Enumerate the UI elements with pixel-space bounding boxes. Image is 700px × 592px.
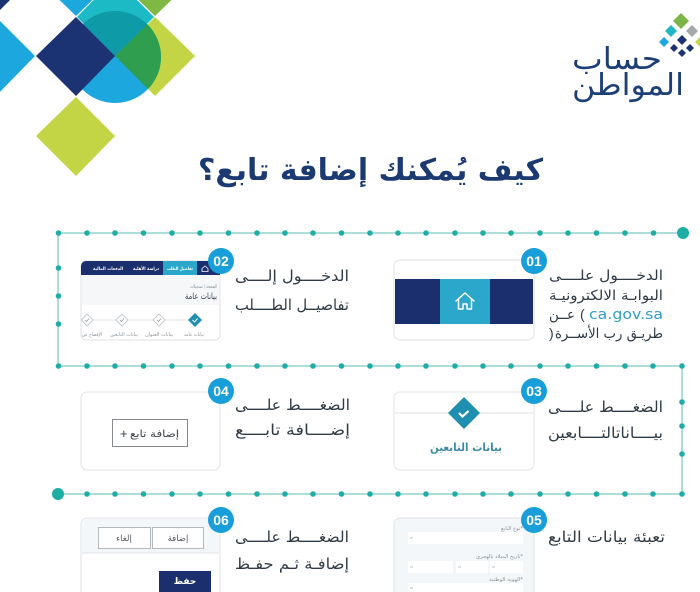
step 05 card: dependent form: نوع التابع* (501, 526, 524, 532)
step 04 text (235, 396, 350, 439)
step 02 card: request details screen: الإفصاح عن (82, 332, 102, 338)
step 04 badge (208, 378, 234, 404)
logo wordmark: المواطن (572, 68, 684, 103)
step 01 badge: 01 (526, 253, 542, 269)
dotted timeline frame (52, 227, 689, 500)
step 06 (81, 507, 349, 592)
step 02 card: request details screen: الصفحة / تسجيلات (190, 284, 217, 290)
step 06 card: add and save buttons: حفظ (174, 577, 196, 587)
step 04 (81, 378, 350, 470)
step 02 card: request details screen: الدفعات المالية (93, 267, 123, 272)
step 03 (394, 378, 663, 470)
step 04 badge: 04 (213, 383, 229, 399)
step 03 text: الضغــــط علــــى (548, 398, 663, 416)
step 02 text (235, 267, 349, 314)
step 02 (81, 248, 349, 340)
step 02 badge (208, 248, 234, 274)
step 06 text: الضغــــط علــــى (235, 528, 349, 546)
step 03 badge (521, 378, 547, 404)
step 06 badge (208, 507, 234, 533)
step 02 card: request details screen: بيانات عامة (185, 292, 217, 302)
step 04 text: إضــــافة تابــــع (235, 421, 350, 439)
step 03 card: dependents data (394, 392, 534, 470)
step 02 card: request details screen: تفاصيل الطلب (167, 267, 193, 272)
step 05 text: تعبئة بيانات التابع (548, 528, 665, 546)
step 03 card: dependents data: بيانات التابعين (430, 441, 502, 454)
step 01 text: ( (580, 306, 585, 322)
step 02 text: تفاصيــل الطــــلب (235, 296, 349, 314)
step 02 card: request details screen: بيانات عامة (184, 332, 204, 338)
decorative geometric diamonds (0, 0, 195, 176)
step 02 card: request details screen: بيانات العنوان (145, 332, 173, 338)
step 05 card: dependent form: تاريخ الميلاد بالهجري* (476, 554, 524, 560)
logo: hesab almowaten (572, 13, 700, 103)
step 01 text (549, 268, 663, 342)
step 05 (394, 507, 665, 592)
step 01 text: ca.gov.sa (589, 307, 663, 323)
step 02 card: request details screen: دراسة الأهلية (133, 265, 160, 272)
logo mark: diamonds (659, 13, 700, 57)
step 06 card: add and save buttons: إضافة (168, 534, 188, 544)
step 04 card: add dependent button: إضافة تابع (130, 429, 179, 440)
step 01 badge (521, 248, 547, 274)
step 06 badge: 06 (213, 512, 229, 528)
step 01 text: الدخــــول علــــى (549, 268, 663, 284)
step 01 text: البوابـة الالكترونيـة (549, 288, 663, 304)
step 04 card: add dependent button (81, 392, 220, 470)
step 04 card: add dependent button: + (120, 426, 128, 441)
step 01 card: home banner (394, 260, 534, 340)
step 06 card: add and save buttons (81, 518, 220, 592)
step 02 card: request details screen (81, 261, 220, 340)
logo wordmark (572, 42, 684, 103)
step 01 text: عــن (549, 307, 575, 323)
step 01 (394, 248, 663, 342)
step 05 card: dependent form (394, 518, 534, 592)
step 04 text: الضغــــط علــــى (235, 396, 350, 414)
step 05 badge (521, 507, 547, 533)
step 01 text: طريـق رب الأســرة (555, 324, 663, 342)
step 05 card: dependent form: الهوية الوطنية* (489, 577, 524, 583)
step 06 card: add and save buttons: إلغاء (116, 534, 132, 544)
step 05 badge: 05 (526, 512, 542, 528)
step 02 badge: 02 (213, 253, 229, 269)
step 06 text: إضافـة ثـم حفـظ (235, 555, 349, 573)
step 06 text (235, 528, 349, 573)
step 02 text: الدخــــول إلــــى (235, 267, 349, 285)
logo wordmark: حساب (572, 42, 662, 77)
step 02 card: request details screen: بيانات التابعين (110, 332, 138, 338)
step 03 badge: 03 (526, 383, 542, 399)
step 01 text: ) (549, 325, 554, 341)
step 03 text (548, 398, 663, 442)
title: كيف يُمكنك إضافة تابع؟ (198, 153, 544, 188)
step 03 text: بيــــاناتالتــــابعين (548, 424, 663, 442)
